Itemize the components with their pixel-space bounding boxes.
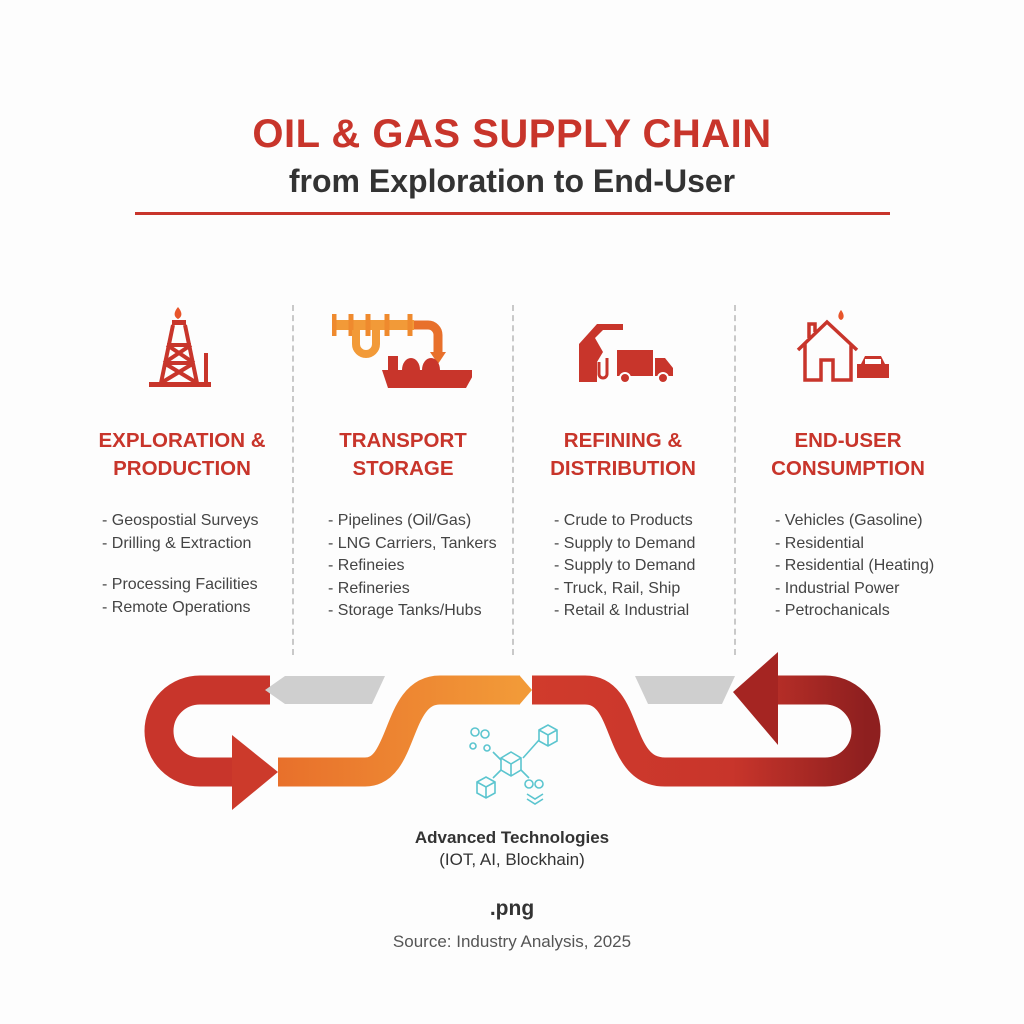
subtitle: from Exploration to End-User	[289, 163, 735, 199]
list: end-user	[775, 512, 934, 619]
list: end-user: - Residential	[775, 534, 864, 552]
icon: fuel pump and truck	[579, 324, 673, 382]
title: OIL & GAS SUPPLY CHAIN	[252, 112, 772, 156]
list: transport: - Pipelines (Oil/Gas)	[328, 512, 471, 529]
heading: exploration	[98, 429, 266, 480]
heading: end-user: END-USER	[794, 429, 902, 452]
source: Source: Industry Analysis, 2025	[393, 932, 631, 951]
icon: pipeline and tanker	[332, 314, 472, 388]
icon: advanced technologies network	[469, 724, 558, 805]
heading: exploration: PRODUCTION	[113, 457, 251, 480]
list: end-user: - Industrial Power	[775, 580, 900, 596]
list: end-user: - Residential (Heating)	[775, 557, 934, 574]
list: exploration: - Geospostial Surveys	[102, 512, 259, 529]
caption: advanced technologies: Advanced Technologies	[415, 828, 609, 847]
list: transport: - Storage Tanks/Hubs	[328, 602, 482, 619]
icon: house and car	[796, 310, 889, 382]
list: refining: - Crude to Products	[554, 512, 693, 529]
list: refining	[554, 512, 695, 619]
caption: advanced technologies	[415, 828, 609, 869]
heading: exploration: EXPLORATION &	[98, 429, 266, 452]
caption: advanced technologies: (IOT, AI, Blockhain)	[439, 850, 585, 869]
heading: end-user: CONSUMPTION	[771, 457, 925, 480]
flow arrows	[144, 652, 880, 810]
heading: transport: TRANSPORT	[339, 429, 467, 452]
list: end-user: - Vehicles (Gasoline)	[775, 512, 923, 529]
icon: oil derrick	[149, 307, 211, 387]
list: refining: - Supply to Demand	[554, 534, 695, 552]
list: transport	[328, 512, 497, 619]
list: exploration	[102, 512, 259, 616]
list: transport: - LNG Carriers, Tankers	[328, 534, 497, 552]
list: exploration: - Remote Operations	[102, 598, 251, 616]
list: transport: - Refineries	[328, 580, 410, 596]
text: .png: .png	[490, 897, 534, 920]
list: refining: - Truck, Rail, Ship	[554, 580, 680, 596]
list: exploration: - Processing Facilities	[102, 576, 258, 593]
list: exploration: - Drilling & Extraction	[102, 534, 251, 552]
heading: refining: DISTRIBUTION	[550, 457, 696, 480]
heading: transport: STORAGE	[352, 457, 454, 480]
list: refining: - Retail & Industrial	[554, 602, 689, 619]
heading: refining: REFINING &	[564, 429, 682, 452]
heading: end-user	[771, 429, 925, 480]
list: refining: - Supply to Demand	[554, 557, 695, 574]
heading: refining	[550, 429, 696, 480]
list: transport: - Refineies	[328, 557, 404, 574]
list: end-user: - Petrochanicals	[775, 602, 890, 619]
heading: transport	[339, 429, 467, 480]
